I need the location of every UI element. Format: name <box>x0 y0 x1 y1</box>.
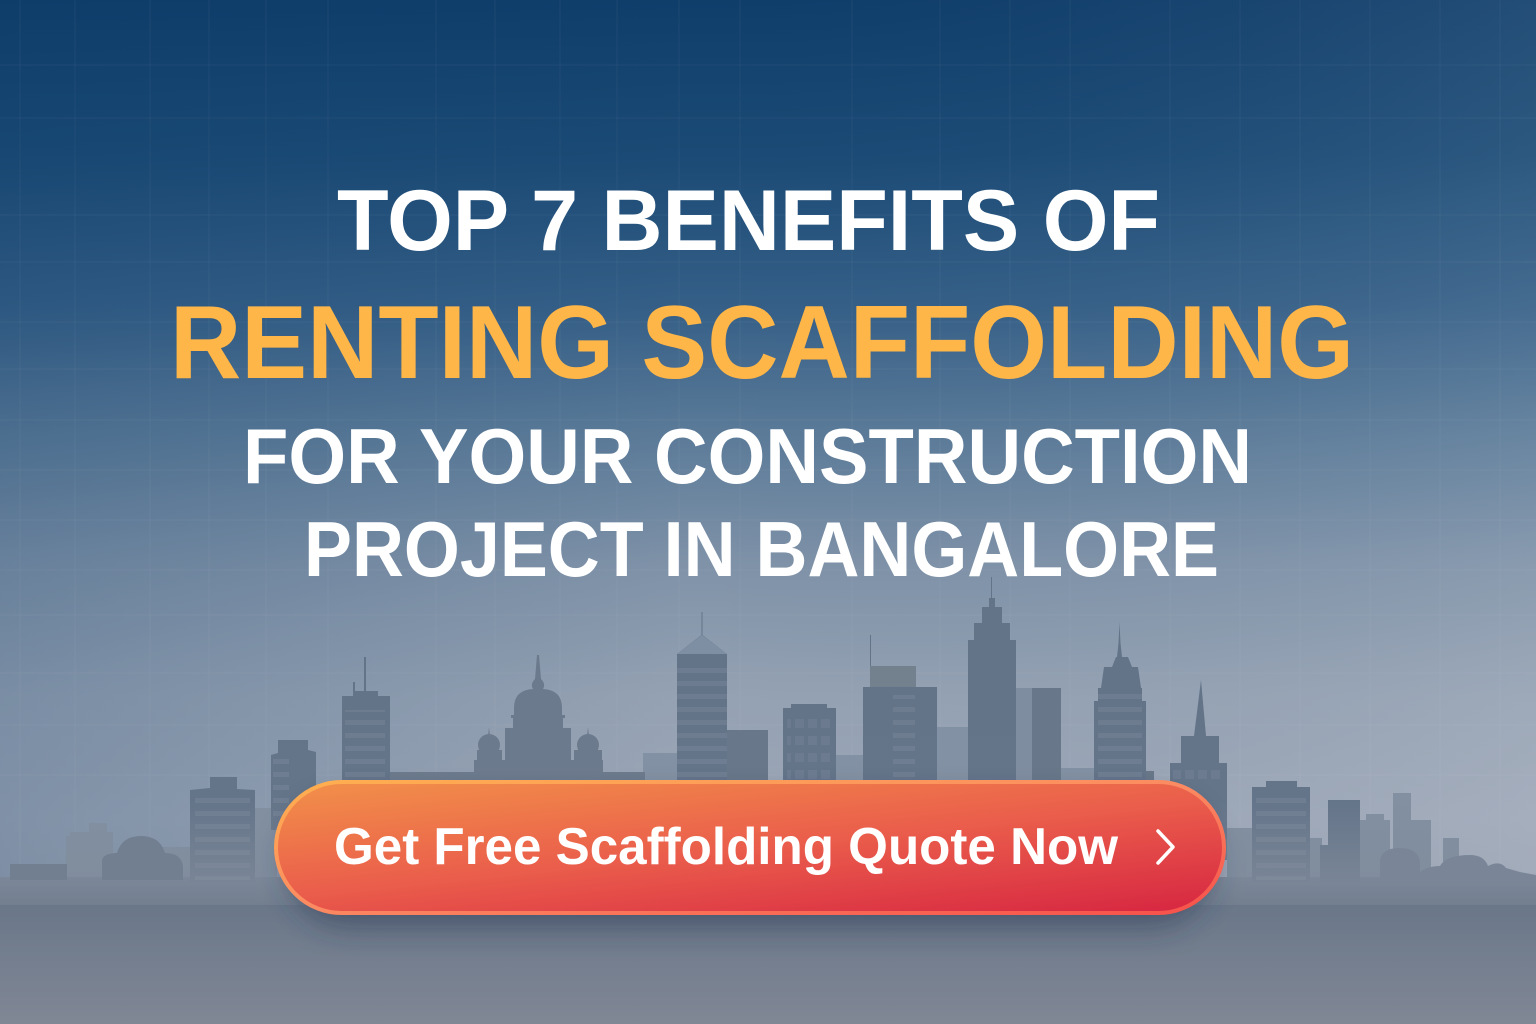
call to action button <box>276 782 1224 928</box>
button body <box>276 782 1224 913</box>
title <box>170 173 1354 593</box>
ground strip <box>0 905 1536 1024</box>
skyline: right towers <box>1252 781 1360 885</box>
skyline: stepped art deco tower <box>1094 622 1154 780</box>
skyline: central towers <box>783 577 1061 780</box>
skyline: striped tower with pyramid roof <box>677 612 768 780</box>
skyline: left towers <box>190 657 390 885</box>
skyline: light background blocks <box>66 727 1459 887</box>
skyline: right domes <box>1380 848 1536 880</box>
title line 2 highlight: RENTING SCAFFOLDING <box>170 285 1354 401</box>
title line 4: PROJECT IN BANGALORE <box>304 505 1219 593</box>
skyline: capitol building with domes <box>390 655 645 780</box>
skyline: left low block and dome <box>10 836 183 880</box>
title line 1: TOP 7 BENEFITS OF <box>337 173 1160 269</box>
button shadow <box>285 800 1215 928</box>
icon: chevron arrow <box>1158 831 1173 863</box>
button label: Get Free Scaffolding Quote Now <box>334 818 1119 876</box>
skyline: ground haze band <box>0 877 1536 905</box>
title line 3: FOR YOUR CONSTRUCTION <box>243 412 1252 500</box>
skyline: spire building <box>1170 680 1227 860</box>
city skyline silhouette <box>0 577 1536 905</box>
